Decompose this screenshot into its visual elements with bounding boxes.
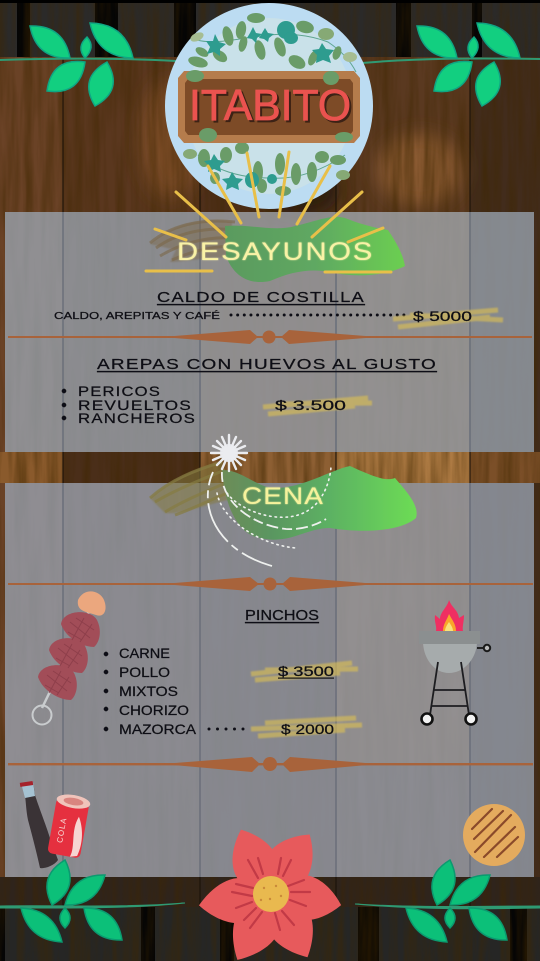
panel warm plank tint <box>201 212 469 763</box>
price: caldo <box>393 308 503 327</box>
menu item: caldo de costilla: CALDO, AREPITAS Y CAFÉ <box>54 309 220 322</box>
price: pinchos: $ 3500 <box>278 663 334 679</box>
price: arepas <box>263 397 372 414</box>
list: pinchos: CHORIZO <box>119 702 189 718</box>
sparkle star <box>211 435 247 471</box>
divider <box>8 577 533 591</box>
price: pinchos <box>251 663 358 680</box>
sunburst rays: desayunos <box>146 152 391 272</box>
price: mazorca <box>251 718 362 737</box>
menu item: caldo de costilla: CALDO DE COSTILLA <box>157 289 365 306</box>
list: pinchos: CARNE <box>119 645 170 661</box>
menu item: arepas con huevos: AREPAS CON HUEVOS AL GUSTO <box>97 356 437 373</box>
logo title: ITABITO <box>189 81 351 130</box>
heading swoosh: cena <box>150 462 417 540</box>
list: pinchos: MAZORCA <box>119 721 197 737</box>
icon: soda bottle <box>20 781 58 868</box>
price: arepas: $ 3.500 <box>275 397 346 413</box>
divider <box>8 330 532 344</box>
menu item: arepas con huevos: REVUELTOS <box>78 397 192 413</box>
wreath foliage <box>183 13 357 196</box>
list: pinchos: POLLO <box>119 664 170 680</box>
icon: soda can <box>47 792 91 859</box>
menu item: arepas con huevos <box>62 356 437 426</box>
panel: cena background <box>5 483 534 877</box>
panel plank lines <box>62 212 471 877</box>
flower <box>196 821 345 961</box>
divider <box>8 757 533 772</box>
heading: desayunos: DESAYUNOS <box>177 238 374 266</box>
top left vine <box>0 23 176 106</box>
heading swoosh: desayunos <box>150 217 405 282</box>
sparkle trails: cena <box>208 467 331 566</box>
menu item: arepas con huevos: RANCHEROS <box>78 410 196 426</box>
logo title: ITABITO <box>191 83 353 132</box>
price: mazorca: $ 2000 <box>281 721 334 737</box>
menu item: arepas con huevos: PERICOS <box>78 383 161 399</box>
list: pinchos <box>104 645 245 737</box>
logo: itabito badge <box>165 3 373 209</box>
price: caldo: $ 5000 <box>413 308 472 324</box>
list: pinchos: MIXTOS <box>119 683 178 699</box>
icon: grill <box>419 600 490 724</box>
bottom left vine <box>0 860 185 942</box>
icon: soda can: COLA <box>55 817 69 844</box>
icon: grilled arepa <box>463 804 525 866</box>
bottom right vine <box>355 860 540 942</box>
icon: meat skewer <box>32 591 106 724</box>
heading: pinchos: PINCHOS <box>245 607 319 624</box>
panel: desayunos background <box>5 212 534 452</box>
sign board <box>178 70 360 143</box>
menu item: caldo de costilla <box>54 289 406 322</box>
top right vine <box>362 23 540 106</box>
heading: cena: CENA <box>242 483 324 510</box>
